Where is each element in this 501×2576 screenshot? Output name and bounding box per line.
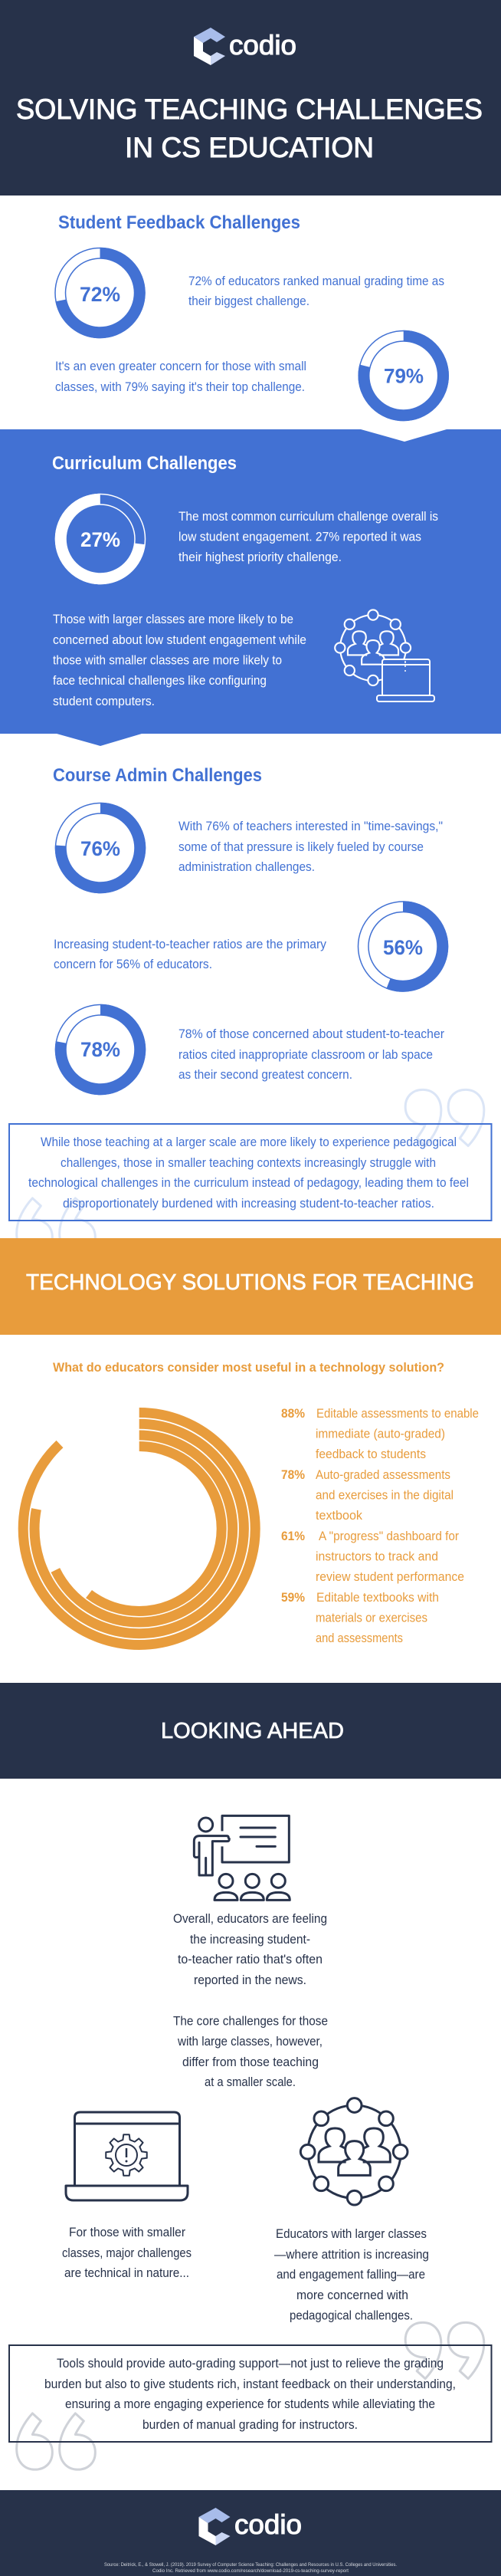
legend item: 78%: 78% (281, 1468, 305, 1482)
callout: pedagogy quote: disproportionately burdened with increasing student-to-teacher ratios. (63, 1197, 434, 1211)
text: core challenges: with large classes, however, (177, 2035, 323, 2049)
text: larger and smaller classes: those with smaller classes are more likely to (53, 654, 282, 668)
text: core challenges: differ from those teaching (182, 2055, 319, 2069)
text: smaller classes: classes, major challenges (62, 2246, 192, 2260)
text: larger classes (274, 2227, 429, 2323)
text: student-to-teacher ratios (54, 938, 327, 971)
text: larger classes: —where attrition is increasing (274, 2248, 429, 2262)
legend item: 59%: 59% (281, 1591, 305, 1605)
text: overall educators: Overall, educators are feeling (173, 1912, 327, 1926)
legend item: 88% (281, 1407, 479, 1461)
text: overall educators: the increasing student- (190, 1933, 310, 1947)
legend item: 61%: A "progress" dashboard for (319, 1530, 459, 1543)
text: classroom or lab space (178, 1027, 444, 1082)
callout: tools quote: Tools should provide auto-grading support—not just to relieve the grading (57, 2357, 444, 2371)
callout: pedagogy quote (9, 1089, 492, 1254)
legend item: 61% (281, 1530, 464, 1584)
heading: curriculum: Curriculum Challenges (52, 453, 237, 474)
text: small classes: It's an even greater concern for those with small (55, 360, 306, 373)
text: overall educators: reported in the news. (194, 1973, 306, 1987)
text: larger classes: Educators with larger classes (276, 2227, 427, 2241)
panel: footer (0, 2490, 501, 2576)
text: overall educators (173, 1912, 327, 1987)
donut: 72%: 72% (80, 283, 120, 306)
text: small classes (55, 360, 306, 394)
donut: 56%: 56% (383, 936, 423, 959)
text: time savings: administration challenges. (178, 860, 315, 874)
callout: pedagogy quote: challenges, those in smaller teaching contexts increasingly struggle with (61, 1156, 436, 1170)
text: core challenges (173, 2015, 328, 2089)
text: student-to-teacher ratios: concern for 56% of educators. (54, 958, 212, 971)
panel: looking ahead banner (0, 1683, 501, 1779)
text: larger classes: more concerned with (296, 2288, 408, 2302)
callout: tools quote: burden but also to give students rich, instant feedback on their understanding, (44, 2377, 456, 2391)
text: low engagement: low student engagement. 27% reported it was (178, 531, 421, 544)
legend item: 61%: review student performance (316, 1570, 464, 1584)
text: smaller classes (62, 2226, 192, 2280)
heading: most useful question: What do educators consider most useful in a technology solution? (53, 1360, 444, 1375)
legend item: 78% (281, 1468, 454, 1523)
panel: curriculum challenges (0, 429, 501, 746)
donut: 78% (55, 1004, 146, 1095)
text: classroom or lab space: as their second greatest concern. (178, 1068, 352, 1082)
legend item: 61%: instructors to track and (316, 1550, 438, 1564)
text: low engagement: their highest priority challenge. (178, 550, 342, 564)
title: SOLVING TEACHING CHALLENGES (16, 94, 483, 125)
heading: student feedback: Student Feedback Challenges (58, 212, 300, 233)
text: core challenges: The core challenges for those (173, 2015, 328, 2029)
legend item: 88%: immediate (auto-graded) (316, 1428, 445, 1441)
legend item: 59% (281, 1591, 439, 1645)
donut: 76%: 76% (80, 837, 120, 860)
callout: tools quote: ensuring a more engaging experience for students while alleviating the (65, 2397, 435, 2411)
text: time savings (178, 820, 443, 874)
text: larger and smaller classes: face technical challenges like configuring (53, 674, 267, 688)
text: larger and smaller classes: concerned about low student engagement while (53, 633, 306, 647)
callout: pedagogy quote: While those teaching at a larger scale are more likely to experience pedagogical (41, 1135, 457, 1149)
text: low engagement: The most common curriculum challenge overall is (178, 510, 438, 524)
donut: 27%: 27% (80, 528, 120, 551)
callout: tools quote: burden of manual grading for instructors. (142, 2418, 358, 2432)
source citation: Codio Inc. Retrieved from www.codio.com/research/download-2019-cs-teaching-survey-report (152, 2568, 349, 2574)
chart: radial bars (23, 1412, 255, 1645)
icon: student network (300, 2098, 408, 2205)
panel: course admin challenges (53, 765, 447, 1095)
logo: codio footer: codio (234, 2509, 302, 2540)
text: manual grading: their biggest challenge. (188, 294, 309, 308)
donut: 79%: 79% (384, 365, 424, 388)
legend: radial bars (281, 1407, 479, 1645)
callout: tools quote (9, 2322, 492, 2469)
donut: 27% (55, 494, 146, 584)
donut: 56% (359, 902, 447, 991)
icon: laptop with gear alert (66, 2112, 188, 2200)
donut: 79% (359, 331, 448, 420)
panel: technology solutions banner: TECHNOLOGY SOLUTIONS FOR TEACHING (26, 1270, 474, 1295)
text: smaller classes: For those with smaller (69, 2226, 185, 2239)
icon: teacher and students (194, 1815, 290, 1900)
text: core challenges: at a smaller scale. (205, 2075, 296, 2089)
panel: technology solutions banner (0, 1238, 501, 1335)
legend item: 88%: Editable assessments to enable (316, 1407, 479, 1421)
legend item: 78%: Auto-graded assessments (316, 1468, 450, 1482)
text: manual grading (188, 274, 444, 308)
title (16, 94, 483, 163)
legend item: 88%: 88% (281, 1407, 305, 1421)
legend item: 78%: and exercises in the digital (316, 1489, 454, 1503)
text: larger and smaller classes (53, 613, 306, 708)
text: overall educators: to-teacher ratio that's often (178, 1953, 323, 1967)
donut: 76% (55, 803, 146, 892)
donut: 72% (55, 248, 145, 337)
legend item: 61%: 61% (281, 1530, 305, 1543)
text: small classes: classes, with 79% saying it's their top challenge. (55, 380, 305, 394)
icon: student network and laptop (335, 610, 434, 702)
text: classroom or lab space: ratios cited inappropriate classroom or lab space (178, 1048, 433, 1062)
text: smaller classes: are technical in nature... (64, 2266, 189, 2280)
panel: looking ahead banner: LOOKING AHEAD (161, 1719, 344, 1743)
logo: codio: codio (229, 29, 296, 61)
legend item: 88%: feedback to students (316, 1447, 426, 1461)
callout: pedagogy quote: technological challenges in the curriculum instead of pedagogy, leading them to feel (28, 1176, 469, 1190)
source citation: Source: Deitrick, E., & Stowell, J. (2019). 2019 Survey of Computer Science Teaching: Challenges and Resources in U.S. Colleges and Universities. (104, 2562, 397, 2568)
text: student-to-teacher ratios: Increasing student-to-teacher ratios are the primary (54, 938, 327, 951)
text: larger classes: pedagogical challenges. (290, 2309, 413, 2323)
source citation (104, 2562, 397, 2574)
legend item: 78%: textbook (316, 1509, 363, 1523)
text: low engagement (178, 510, 438, 564)
panel: header (0, 0, 501, 196)
text: time savings: With 76% of teachers interested in "time-savings," (178, 820, 443, 833)
title: IN CS EDUCATION (125, 132, 374, 163)
text: manual grading: 72% of educators ranked manual grading time as (188, 274, 444, 288)
text: time savings: some of that pressure is likely fueled by course (178, 840, 424, 854)
text: larger and smaller classes: student computers. (53, 695, 155, 708)
text: classroom or lab space: 78% of those concerned about student-to-teacher (178, 1027, 444, 1041)
legend item: 59%: materials or exercises (316, 1612, 427, 1625)
panel: student feedback challenges (55, 212, 448, 420)
logo: codio (194, 28, 296, 65)
logo: codio footer (199, 2508, 302, 2545)
donut: 78%: 78% (80, 1038, 120, 1061)
heading: course admin: Course Admin Challenges (53, 765, 262, 786)
text: larger and smaller classes: Those with larger classes are more likely to be (53, 613, 293, 626)
legend item: 59%: and assessments (316, 1631, 403, 1645)
legend item: 59%: Editable textbooks with (316, 1591, 439, 1605)
text: larger classes: and engagement falling—are (277, 2268, 425, 2282)
